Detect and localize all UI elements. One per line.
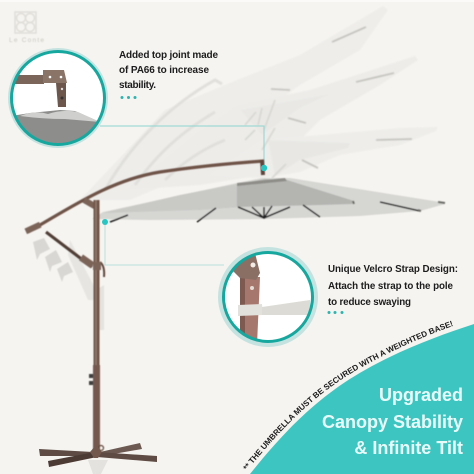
callout text: velcro strap: to reduce swaying	[328, 297, 411, 308]
umbrella canopy	[92, 178, 445, 222]
cross base	[39, 443, 157, 474]
callout text: top joint	[119, 50, 218, 99]
callout text: top joint: stability.	[119, 80, 156, 91]
panel heading: Upgraded	[379, 385, 463, 405]
callout circle: velcro strap	[218, 247, 318, 347]
ghost tilted crank handles	[33, 238, 104, 330]
callout text: top joint: of PA66 to increase	[119, 65, 209, 76]
callout text: velcro strap: Unique Velcro Strap Design:	[328, 264, 458, 275]
callout text: velcro strap	[328, 264, 458, 314]
curved warning text: ** THE UMBRELLA MUST BE SECURED WITH A WEIGHTED BASE!	[243, 320, 453, 469]
panel heading: Canopy Stability	[322, 412, 463, 432]
umbrella arm and pole	[24, 160, 264, 452]
callout text: velcro strap: Attach the strap to the pole	[328, 281, 454, 292]
teal corner panel	[250, 324, 474, 474]
teal leader line: velcro strap	[105, 222, 224, 265]
panel heading: & Infinite Tilt	[354, 438, 463, 458]
logo: Le Conte: Le Conte	[9, 37, 44, 44]
teal leader line: top joint	[100, 126, 264, 168]
logo: Le Conte	[9, 12, 44, 44]
callout circle: top joint	[5, 48, 110, 150]
connection dots	[102, 165, 267, 225]
callout text: top joint: Added top joint made	[119, 50, 218, 61]
ghost tilted canopies	[80, 6, 438, 200]
panel heading	[322, 385, 463, 458]
